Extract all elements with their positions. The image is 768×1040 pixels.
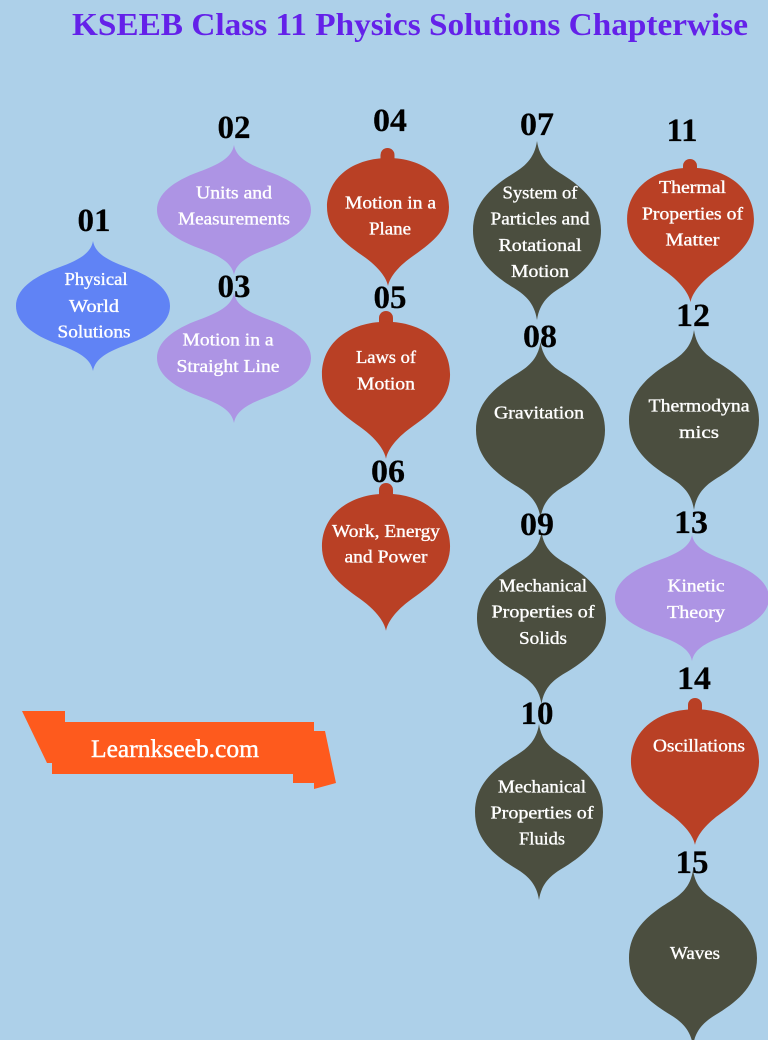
item 07: System of Particles and Rotational Motion: 07 — [520, 107, 554, 143]
item 13: Kinetic Theory: Theory — [667, 602, 725, 622]
item 09: Mechanical Properties of Solids: Properties of — [492, 602, 594, 622]
item 15: Waves — [629, 845, 757, 1040]
item 09: Mechanical Properties of Solids — [477, 507, 606, 704]
item 02: Units and Measurements — [157, 110, 311, 275]
item 02: Units and Measurements: 02 — [218, 110, 250, 146]
item 08: Gravitation: Gravitation — [494, 402, 584, 422]
item 07: System of Particles and Rotational Motion: Particles and — [490, 208, 590, 228]
item 07: System of Particles and Rotational Motion: System of — [502, 182, 578, 202]
item 04: Motion in a Plane: Motion in a — [345, 192, 436, 212]
item 12: Thermodynamics: Thermodyna — [648, 396, 750, 416]
item 15: Waves: 15 — [676, 845, 708, 881]
item 13: Kinetic Theory — [615, 505, 768, 661]
item 01: Physical World Solutions: World — [69, 296, 119, 316]
item 08: Gravitation: 08 — [523, 319, 557, 355]
item 08: Gravitation — [476, 319, 605, 518]
item 06: Work, Energy and Power — [322, 454, 450, 631]
item 10: Mechanical Properties of Fluids: Properties of — [490, 802, 594, 822]
item 03: Motion in a Straight Line: Motion in a — [182, 330, 274, 350]
title: KSEEB Class 11 Physics Solutions Chapterwise — [72, 6, 748, 42]
item 03: Motion in a Straight Line: Straight Line — [176, 356, 280, 376]
item 01: Physical World Solutions: Physical — [64, 269, 128, 289]
item 13: Kinetic Theory: Kinetic — [668, 576, 725, 596]
item 11: Thermal Properties of Matter: 11 — [666, 113, 698, 149]
item 12: Thermodynamics: 12 — [676, 298, 710, 334]
item 03: Motion in a Straight Line — [157, 269, 311, 423]
item 05: Laws of Motion: Laws of — [356, 347, 416, 367]
item 06: Work, Energy and Power: Work, Energy — [332, 521, 440, 541]
item 12: Thermodynamics: mics — [679, 422, 719, 442]
item 05: Laws of Motion — [322, 280, 450, 459]
banner: Learnkseeb.com: Learnkseeb.com — [91, 736, 260, 763]
item 07: System of Particles and Rotational Motion — [473, 107, 601, 320]
item 05: Laws of Motion: Motion — [357, 374, 415, 394]
item 10: Mechanical Properties of Fluids: 10 — [520, 696, 554, 732]
item 10: Mechanical Properties of Fluids — [475, 696, 603, 900]
item 03: Motion in a Straight Line: 03 — [218, 269, 250, 305]
item 06: Work, Energy and Power: and Power — [344, 546, 428, 566]
item 04: Motion in a Plane: Plane — [369, 218, 411, 238]
item 11: Thermal Properties of Matter: Thermal — [659, 177, 726, 197]
item 05: Laws of Motion: 05 — [374, 280, 406, 316]
item 02: Units and Measurements: Measurements — [178, 208, 290, 228]
item 06: Work, Energy and Power: 06 — [371, 454, 405, 490]
item 14: Oscillations: 14 — [677, 661, 711, 697]
item 01: Physical World Solutions: Solutions — [58, 322, 130, 342]
item 10: Mechanical Properties of Fluids: Mechanical — [498, 776, 586, 796]
item 11: Thermal Properties of Matter — [627, 113, 754, 302]
item 02: Units and Measurements: Units and — [196, 182, 272, 202]
item 09: Mechanical Properties of Solids: Mechanical — [499, 576, 587, 596]
item 10: Mechanical Properties of Fluids: Fluids — [519, 828, 565, 848]
item 07: System of Particles and Rotational Motion: Motion — [511, 261, 569, 281]
item 12: Thermodynamics — [629, 298, 759, 510]
item 04: Motion in a Plane: 04 — [373, 103, 407, 139]
item 09: Mechanical Properties of Solids: Solids — [519, 628, 567, 648]
item 09: Mechanical Properties of Solids: 09 — [520, 507, 554, 543]
banner: Learnkseeb.com — [22, 711, 336, 789]
item 15: Waves: Waves — [670, 943, 720, 963]
item 13: Kinetic Theory: 13 — [674, 505, 708, 541]
item 04: Motion in a Plane — [327, 103, 449, 286]
item 01: Physical World Solutions: 01 — [78, 203, 110, 239]
item 11: Thermal Properties of Matter: Properties of — [642, 204, 743, 224]
item 14: Oscillations — [631, 661, 759, 845]
item 07: System of Particles and Rotational Motion: Rotational — [498, 235, 582, 255]
item 01: Physical World Solutions — [16, 203, 170, 371]
item 14: Oscillations: Oscillations — [653, 736, 745, 756]
item 11: Thermal Properties of Matter: Matter — [666, 230, 720, 250]
